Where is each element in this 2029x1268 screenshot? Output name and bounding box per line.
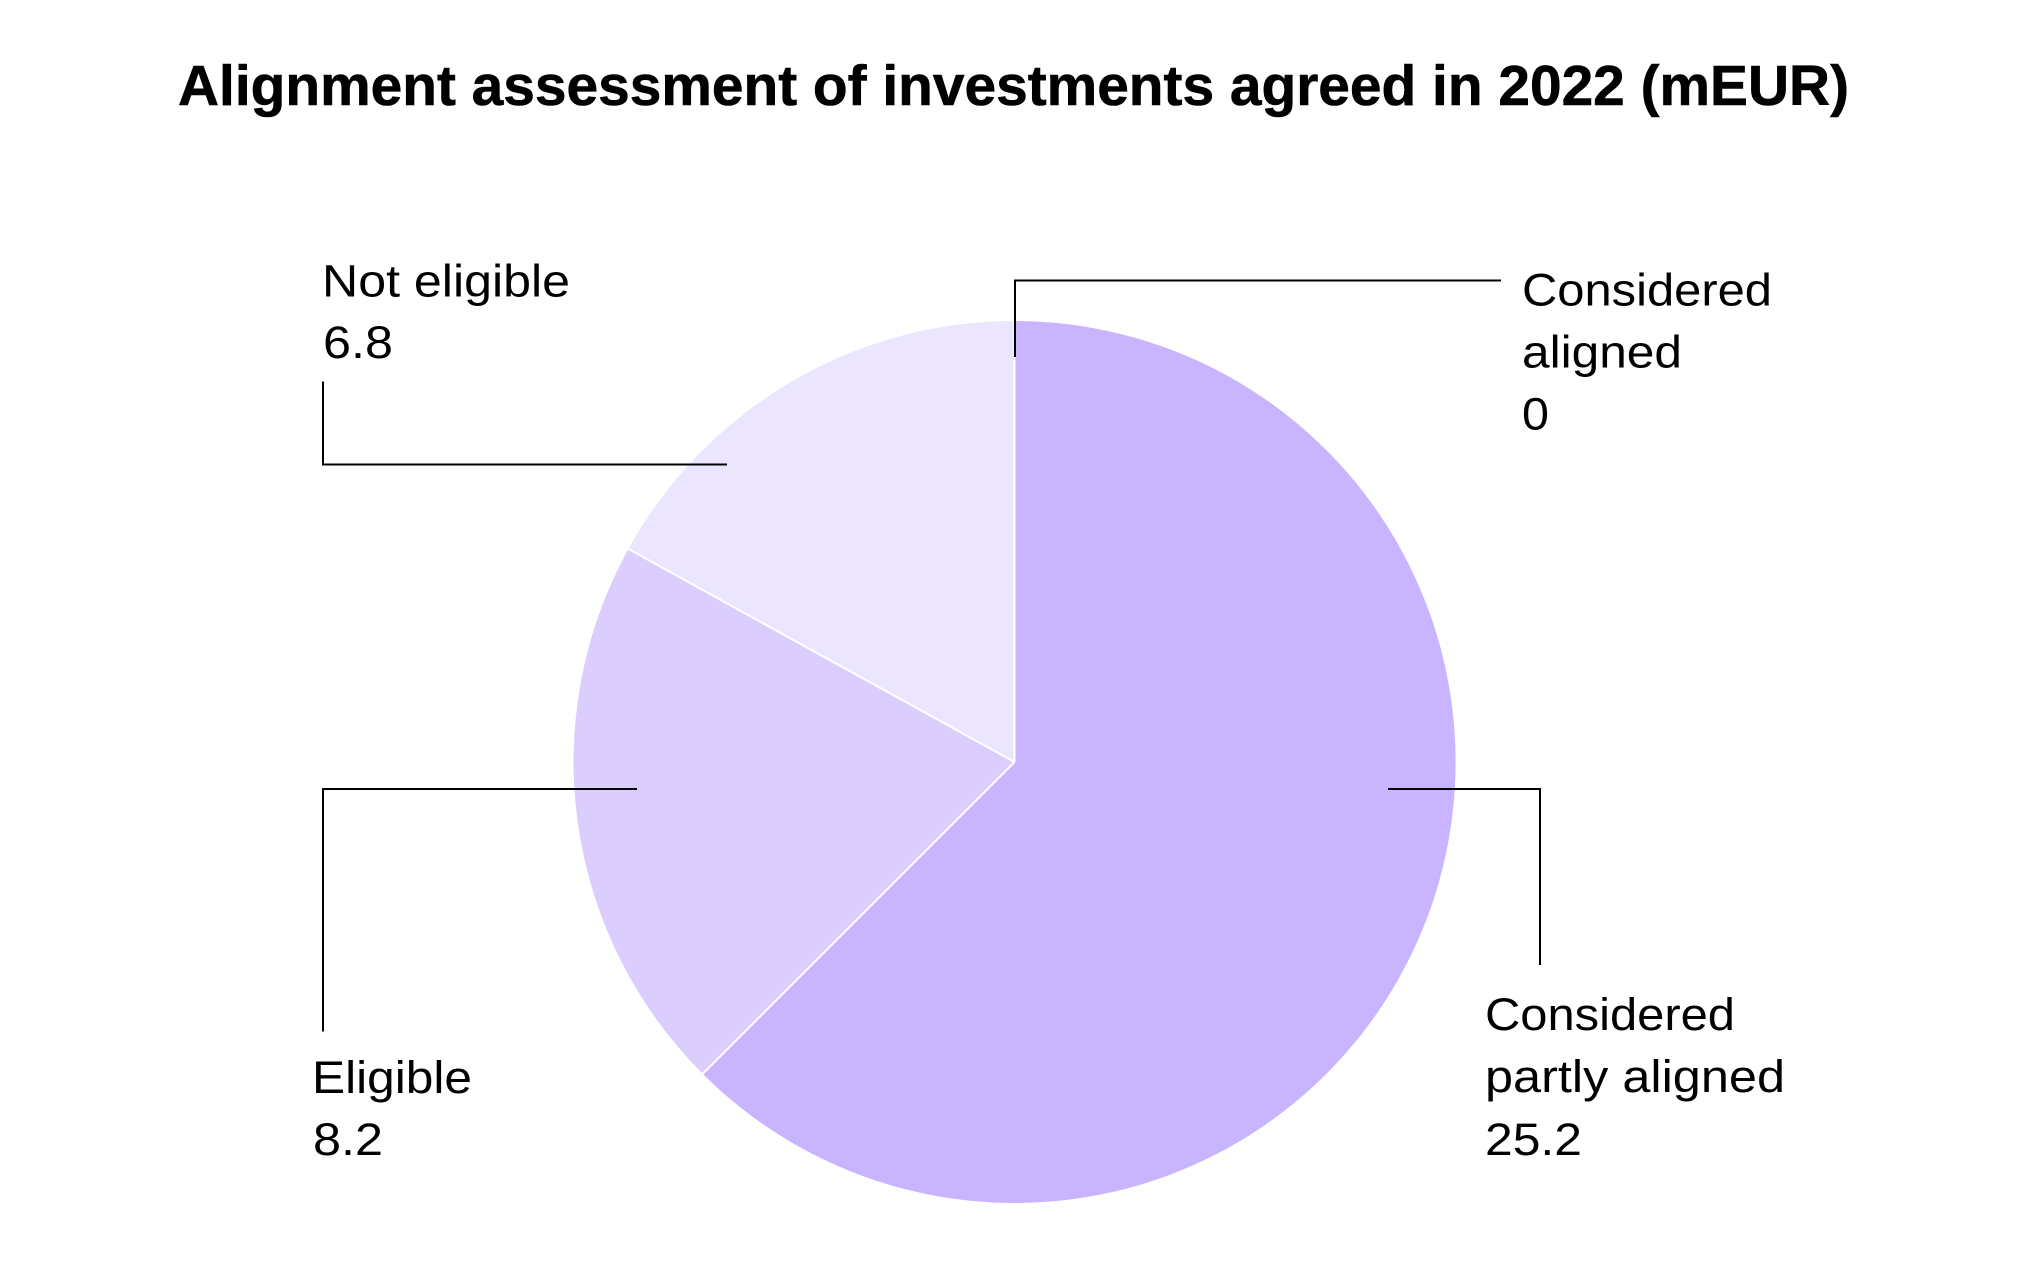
- label: considered partly aligned: 25.2: [1485, 1114, 1582, 1165]
- label: eligible: [312, 1052, 472, 1165]
- label: not eligible: Not eligible: [322, 256, 570, 306]
- label: considered aligned: Considered: [1522, 264, 1772, 316]
- slice: eligible 8.2: [574, 549, 1014, 1074]
- label: considered partly aligned: Considered: [1485, 989, 1735, 1040]
- label: considered aligned: 0: [1522, 388, 1549, 440]
- title: Alignment assessment of investments agreed in 2022 (mEUR): [178, 54, 1849, 118]
- leader line: considered partly aligned: [1388, 789, 1540, 965]
- leader line: not eligible: [323, 382, 727, 464]
- label: eligible: Eligible: [312, 1052, 472, 1103]
- label: considered partly aligned: partly aligned: [1485, 1051, 1785, 1102]
- label: considered aligned: aligned: [1522, 326, 1682, 378]
- slice: not eligible 6.8: [628, 321, 1014, 762]
- leader line: considered aligned: [1015, 280, 1501, 357]
- label: considered partly aligned: [1485, 989, 1785, 1165]
- leader line: eligible: [323, 789, 637, 1032]
- label: eligible: 8.2: [313, 1114, 383, 1165]
- label: considered aligned: [1522, 264, 1772, 440]
- slice: considered partly aligned 25.2: [703, 321, 1456, 1203]
- pie chart: [574, 321, 1456, 1203]
- label: not eligible: [322, 256, 570, 368]
- label: not eligible: 6.8: [323, 317, 393, 368]
